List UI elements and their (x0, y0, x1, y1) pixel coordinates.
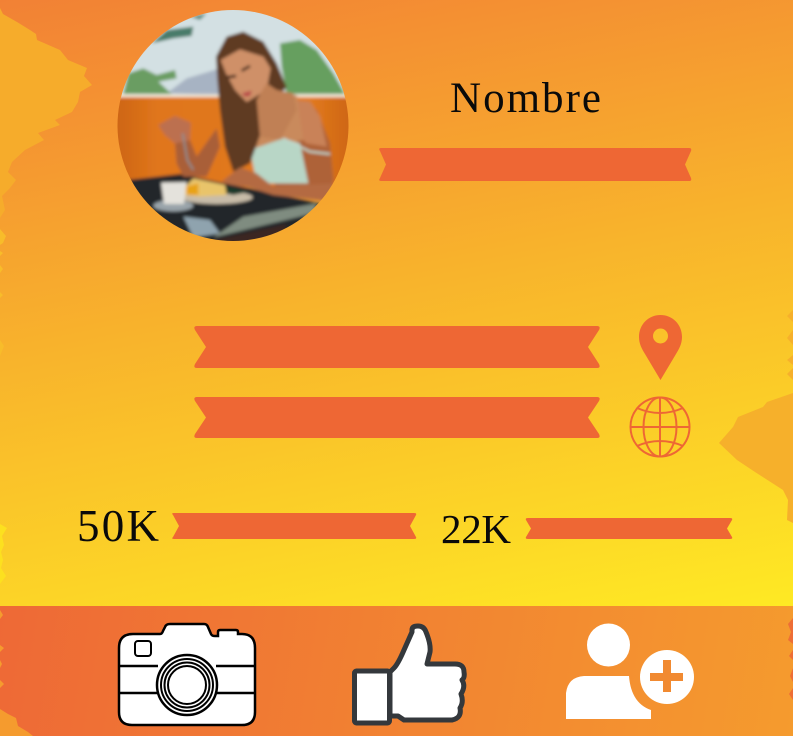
ribbon: followers (172, 513, 416, 539)
background torn edge left upper bumps (0, 229, 6, 356)
torso (250, 95, 303, 150)
name label: Nombre (450, 75, 601, 122)
profile photo (118, 10, 348, 241)
food plate (181, 191, 253, 204)
dress (250, 138, 308, 183)
band torn edge left (0, 610, 33, 736)
ribbon: website field (194, 397, 600, 438)
foliage (280, 40, 345, 94)
hand knife (222, 167, 333, 202)
sky (121, 10, 344, 97)
ribbon: name field (379, 148, 691, 181)
face (221, 49, 271, 102)
orange wall (107, 97, 360, 187)
icon: camera (119, 624, 255, 725)
arm right (274, 125, 334, 188)
ribbon: location field (194, 326, 600, 368)
hair (216, 32, 287, 172)
band torn edge right (788, 618, 793, 700)
background torn edge right (719, 310, 793, 523)
following count 22K: 22K (441, 506, 511, 552)
bottom band (0, 606, 793, 736)
icon: globe (630, 398, 690, 456)
background torn edge left lower bumps (0, 524, 7, 584)
ledge (107, 94, 360, 97)
icon: location pin (639, 315, 682, 380)
follower count 50K: 50K (77, 501, 160, 551)
icon: add user (566, 624, 694, 719)
arm left (175, 128, 220, 177)
table (130, 172, 320, 240)
coffee cup (153, 200, 193, 211)
background torn edge left (0, 8, 92, 218)
hand fork (158, 116, 191, 143)
ribbon: following (526, 518, 732, 539)
icon: thumbs up (354, 626, 464, 723)
